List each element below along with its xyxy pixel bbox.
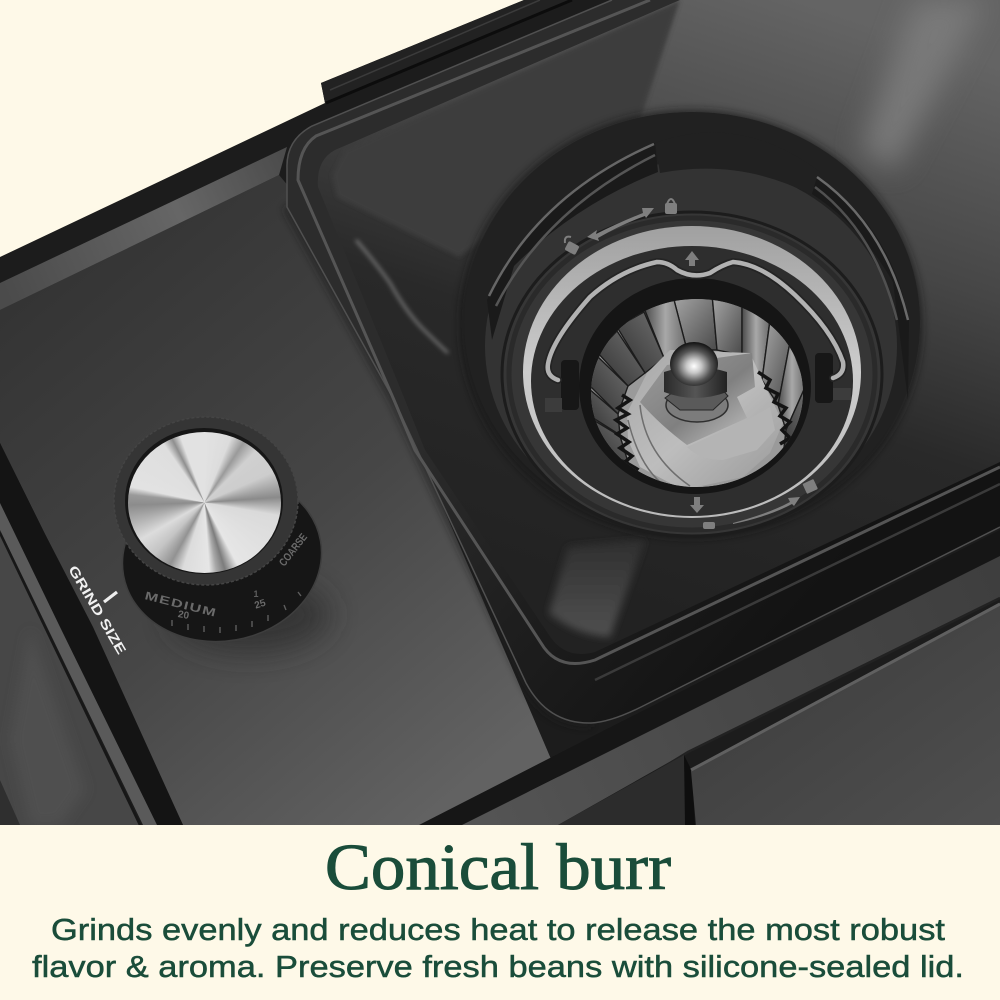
knob skirt: [109, 459, 335, 657]
upper plate: [640, 353, 755, 445]
lid inner rim lines: [298, 0, 1000, 680]
grind size knob: [109, 417, 335, 657]
upper right groove lip: [812, 177, 909, 400]
description text: [32, 912, 964, 984]
scratch highlight on lid: [356, 240, 448, 353]
wire handle: [548, 262, 843, 380]
serrated edge right: [758, 372, 790, 444]
knob skirt rim: [109, 459, 335, 657]
side clips: [545, 353, 851, 412]
icon: down arrow: [690, 497, 704, 513]
serrated edge left: [616, 395, 645, 488]
lid interior base: [300, 0, 1000, 680]
knob grip collar: [114, 417, 298, 585]
description line 2: flavor & aroma. Preserve fresh beans with silicone-sealed lid.: [32, 949, 964, 984]
description line 1: Grinds evenly and reduces heat to release the most robust: [51, 912, 945, 947]
swirl sector: [687, 407, 775, 460]
knob metal face: [128, 432, 281, 573]
conical burr: [588, 294, 806, 490]
reflection on lid slope: [549, 540, 645, 637]
lower right door panel: [691, 603, 1000, 825]
icon: lower arrow: [733, 497, 800, 524]
label: 1: 1: [253, 589, 259, 599]
grind size label: GRIND SIZE: [65, 563, 129, 657]
knob shadow: [170, 577, 330, 653]
burr cavity: [591, 299, 803, 487]
light band along panel edge: [0, 147, 287, 310]
lid interior: [300, 0, 1000, 680]
dome: [670, 342, 718, 386]
knurled cap: [664, 367, 727, 398]
nut and cap: [664, 342, 728, 422]
well dark band: [484, 112, 920, 350]
icon: double arrow: [587, 208, 654, 241]
outer burr blades: [588, 294, 806, 465]
label: 25: 25: [253, 598, 268, 612]
hex nut: [665, 387, 728, 410]
main top panel: [0, 175, 560, 825]
icon: closed lock: [665, 199, 677, 214]
cone swirl lines: [628, 405, 690, 488]
rear ledge: [321, 0, 572, 103]
left lighter strip: [0, 503, 157, 825]
lid markings: [564, 199, 818, 529]
label: 20: 20: [177, 609, 190, 622]
icon: up arrow: [685, 251, 699, 266]
lid upper left plane: [332, 0, 680, 257]
lid rim highlight: [287, 0, 1000, 723]
lid outer rim: [287, 0, 1000, 723]
burr holder ring: [579, 278, 811, 494]
band detail lines: [670, 597, 1000, 762]
left side panel: [0, 533, 140, 825]
lower right black stripe: [419, 758, 558, 825]
inner floor ring: [502, 212, 882, 536]
bright streak on lid: [860, 0, 985, 170]
cone body: [627, 350, 783, 490]
knob inner edge: [125, 428, 283, 574]
title: Conical burr: [325, 831, 671, 904]
silicone seal ring: [523, 226, 861, 518]
label: medium: MEDIUM: [143, 590, 218, 620]
knob scale: [143, 531, 310, 633]
lid shadow on panel: [285, 208, 523, 694]
upper band block: [658, 162, 792, 186]
icon: open lock: [564, 237, 580, 255]
well floor: [485, 164, 897, 456]
well shadow: [459, 109, 923, 539]
upper left groove lip: [487, 143, 658, 340]
label: coarse: COARSE: [277, 531, 310, 569]
icon: lower lock left: [703, 522, 715, 529]
grinding well: [459, 109, 923, 539]
door seam: [684, 755, 695, 825]
scale ticks: [172, 592, 301, 633]
lower right light band: [462, 556, 1000, 825]
washer: [666, 388, 728, 422]
grind size tick mark: [104, 592, 117, 602]
left black strip: [0, 443, 183, 825]
caption band: [0, 825, 1000, 1000]
icon: lower lock right: [802, 479, 818, 494]
lower front piece: [558, 755, 686, 825]
